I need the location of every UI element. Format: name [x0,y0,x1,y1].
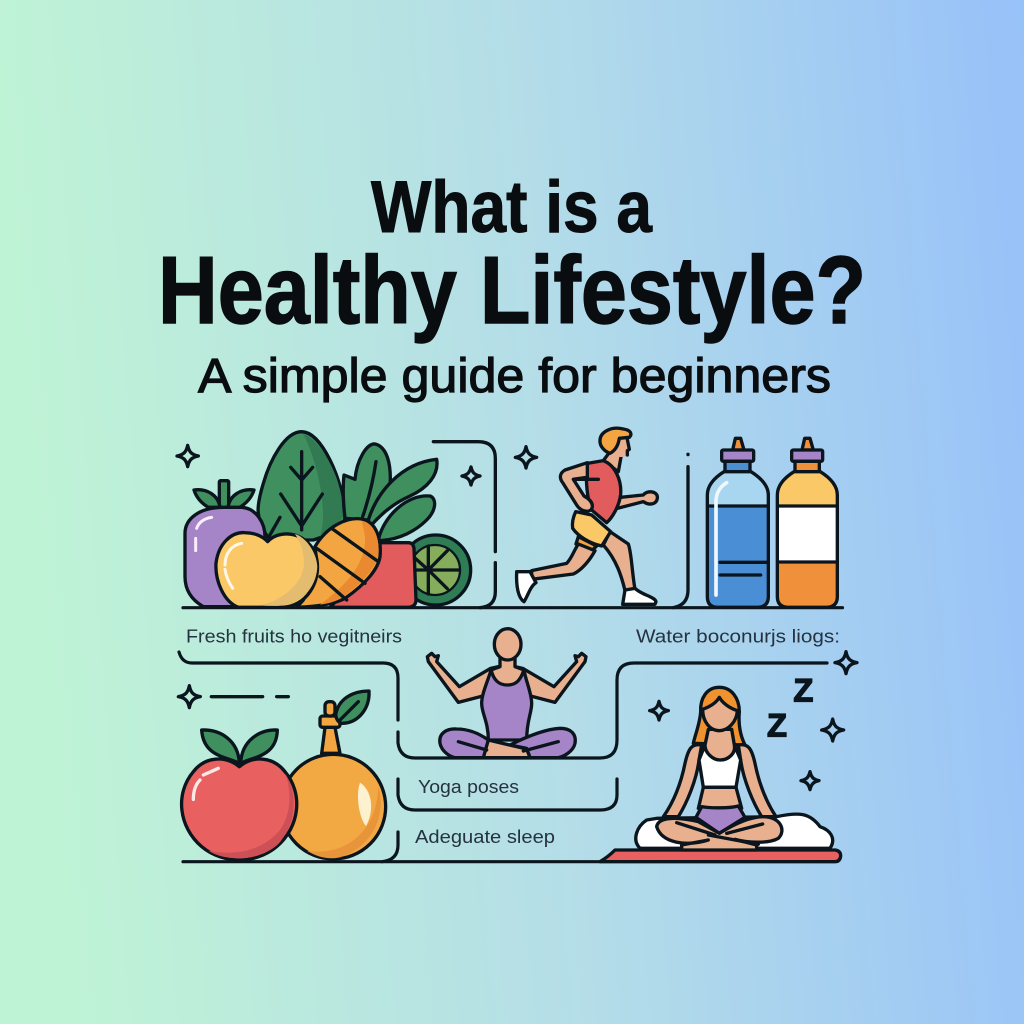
icon: sparkle right [462,467,480,485]
runner front arm [560,463,598,511]
head [494,629,521,660]
illustration: yoga figure [427,629,586,758]
illustration: apple and orange [178,686,386,860]
label: sleep: Adeguate sleep [415,827,555,847]
bracket [673,454,688,608]
connector lines and shelves [179,608,842,862]
right arm [515,653,586,702]
illustration: fruits and vegetables [177,432,495,608]
icon: large leaf [258,432,345,540]
icon: purple fruit [185,481,265,607]
icon: upright leaf [343,444,390,520]
icon: sparkle left [177,445,198,467]
title line two: Healthy Lifestyle? [158,237,866,344]
illustration: woman meditating [600,652,857,862]
exercise mat [600,850,841,862]
runner front leg [603,532,656,604]
icon: sparkles [650,652,857,790]
icon: side leaf lower [378,496,435,541]
sleep letter large: Z [793,672,813,709]
label: yoga: Yoga poses [418,777,519,797]
runner shorts [572,512,611,546]
sleep letter small: Z [767,707,787,744]
left arm [427,653,498,702]
icon: sparkle [515,447,537,468]
illustration: bottles and divider [673,438,837,608]
icon: water bottle [707,438,768,607]
torso [482,670,532,740]
label: fruits and vegetables: Fresh fruits ho vegitneirs [186,627,402,647]
neck and chest [491,658,524,686]
bracket [433,442,495,608]
icon: side leaf upper [368,459,437,527]
runner shirt [586,461,621,523]
icon: yellow heart fruit [216,533,317,607]
icon: lime slice [401,535,471,605]
cushion [636,814,833,848]
subtitle: A simple guide for beginners [198,350,831,403]
icon: orange with stem [281,691,386,859]
icon: red apple [182,730,297,860]
runner head [600,428,631,457]
title line one: What is a [371,167,653,248]
icon: red box [330,543,416,607]
runner back arm [613,492,657,509]
label: water: Water boconurjs liogs: [636,627,840,647]
icon: sparkle with dashes [178,686,288,708]
runner neck [603,452,622,472]
runner back leg [517,537,597,602]
icon: juice bottle [777,438,837,607]
crossed legs [440,728,575,758]
icon: orange carrot [297,519,380,607]
illustration: runner [515,428,657,604]
woman figure [657,687,782,850]
